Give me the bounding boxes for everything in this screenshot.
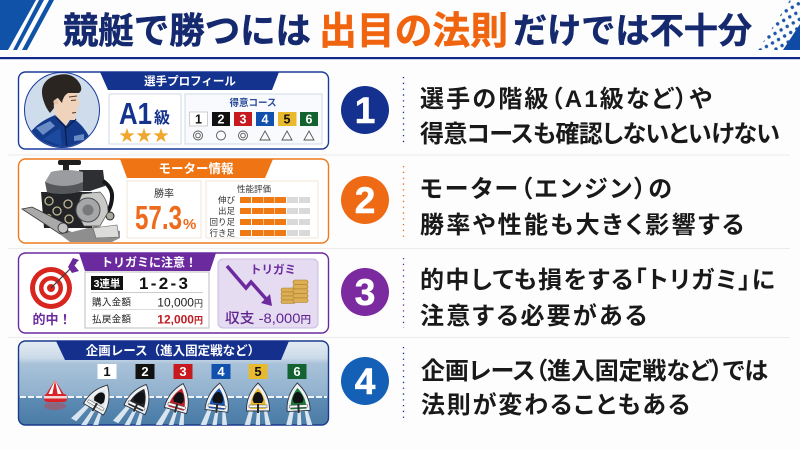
win rate box: % bbox=[183, 216, 196, 233]
panel heading: モーター情報 bbox=[158, 161, 234, 176]
number flags: 6 bbox=[293, 364, 301, 379]
icon: target with arrow bbox=[30, 258, 79, 309]
number badge 3 bbox=[341, 268, 389, 316]
loss box bbox=[218, 259, 318, 328]
title: 競艇で勝つには bbox=[63, 10, 311, 51]
win rate box: 57.3 bbox=[135, 199, 182, 236]
panel: torigami warning bbox=[18, 253, 328, 333]
buoy bbox=[44, 380, 67, 410]
title highlight: 出目の法則 bbox=[319, 11, 508, 53]
number badge 2 bbox=[341, 176, 389, 224]
ticket table: 12,000円 bbox=[157, 312, 203, 326]
number flags: 2 bbox=[141, 364, 149, 379]
panel: special race bbox=[18, 341, 328, 435]
text: point 1 bbox=[420, 86, 780, 148]
engine illustration bbox=[22, 160, 120, 242]
panel: player profile bbox=[18, 72, 328, 150]
icon: coins bbox=[281, 280, 308, 304]
number flags: 4 bbox=[217, 364, 225, 379]
text: point 1: 得意コースも確認しないといけない bbox=[420, 121, 780, 148]
number badge 4 bbox=[341, 357, 389, 405]
text: point 3: 注意する必要がある bbox=[420, 302, 647, 330]
row separators bbox=[8, 154, 790, 338]
number badge 1 bbox=[341, 86, 389, 134]
performance rating chart: 性能評価 bbox=[237, 184, 271, 194]
performance rating chart: 伸び bbox=[218, 195, 235, 205]
ticket table bbox=[85, 272, 209, 328]
favourite course table: 4 bbox=[262, 112, 269, 126]
portrait of racer bbox=[24, 72, 100, 150]
favourite course table: 5 bbox=[284, 112, 291, 126]
ticket table: 払戻金額 bbox=[92, 314, 131, 326]
panel heading: トリガミに注意！ bbox=[101, 254, 197, 270]
favourite course table bbox=[185, 94, 322, 144]
performance rating chart: 行き足 bbox=[209, 228, 235, 238]
hit label: 的中！ bbox=[32, 312, 72, 327]
panel heading bbox=[56, 341, 289, 360]
number badge 2: 2 bbox=[355, 180, 375, 221]
panel heading: 選手プロフィール bbox=[144, 74, 236, 88]
text: point 2 bbox=[420, 176, 744, 239]
panel heading bbox=[120, 159, 273, 178]
number badge 1: 1 bbox=[355, 90, 375, 131]
favourite course table: 2 bbox=[218, 112, 225, 126]
win rate box bbox=[127, 181, 201, 238]
grade box: 級 bbox=[154, 109, 170, 127]
favourite course table: 得意コース bbox=[229, 97, 277, 109]
panel: motor info bbox=[18, 159, 328, 243]
text: point 2: モーター（エンジン）の bbox=[420, 176, 672, 203]
loss box: トリガミ bbox=[250, 262, 296, 276]
text: point 3: 的中しても損をする「トリガミ」に bbox=[420, 267, 775, 294]
left stripe decoration bbox=[0, 0, 54, 50]
performance rating chart: 出足 bbox=[218, 206, 235, 216]
panel heading: 企画レース（進入固定戦など） bbox=[86, 343, 260, 358]
ticket table: 購入金額 bbox=[92, 296, 131, 308]
grade box: A1 bbox=[119, 96, 152, 131]
panel heading bbox=[79, 253, 216, 271]
number flags: 5 bbox=[254, 364, 262, 379]
ticket table: 1-2-3 bbox=[139, 274, 188, 293]
course marks bbox=[194, 131, 314, 140]
performance rating chart bbox=[206, 181, 318, 238]
text: point 4: 法則が変わることもある bbox=[421, 391, 690, 419]
text: point 3 bbox=[420, 267, 775, 330]
text: point 4: 企画レース（進入固定戦など）では bbox=[421, 358, 768, 385]
text: point 1: 選手の階級（A1級など）や bbox=[420, 86, 712, 113]
balance: 収支 -8,000 円 bbox=[225, 310, 311, 326]
number flags: 1 bbox=[103, 364, 111, 379]
stars: ★★★ bbox=[119, 128, 169, 145]
ticket table: 10,000円 bbox=[157, 296, 203, 310]
right dotted corner decoration bbox=[758, 0, 800, 50]
performance rating chart: 回り足 bbox=[209, 217, 235, 227]
number flags: 3 bbox=[179, 364, 187, 379]
text: point 2: 勝率や性能も大きく影響する bbox=[420, 212, 744, 239]
favourite course table: 3 bbox=[240, 112, 247, 126]
number badge 3: 3 bbox=[355, 272, 375, 313]
course line bbox=[20, 396, 327, 398]
number badge 4: 4 bbox=[355, 361, 376, 402]
ticket table: 3連単 bbox=[94, 277, 121, 290]
boats bbox=[71, 382, 312, 425]
favourite course table: 1 bbox=[195, 112, 202, 126]
panel heading bbox=[100, 72, 279, 90]
number flags bbox=[98, 364, 306, 379]
favourite course table: 6 bbox=[306, 112, 313, 126]
win rate box: 勝率 bbox=[154, 187, 174, 200]
text: point 4 bbox=[421, 358, 768, 419]
title end: だけでは不十分 bbox=[513, 12, 752, 51]
grade box bbox=[109, 94, 181, 145]
down arrow bbox=[227, 266, 272, 306]
header rule bbox=[0, 57, 800, 59]
